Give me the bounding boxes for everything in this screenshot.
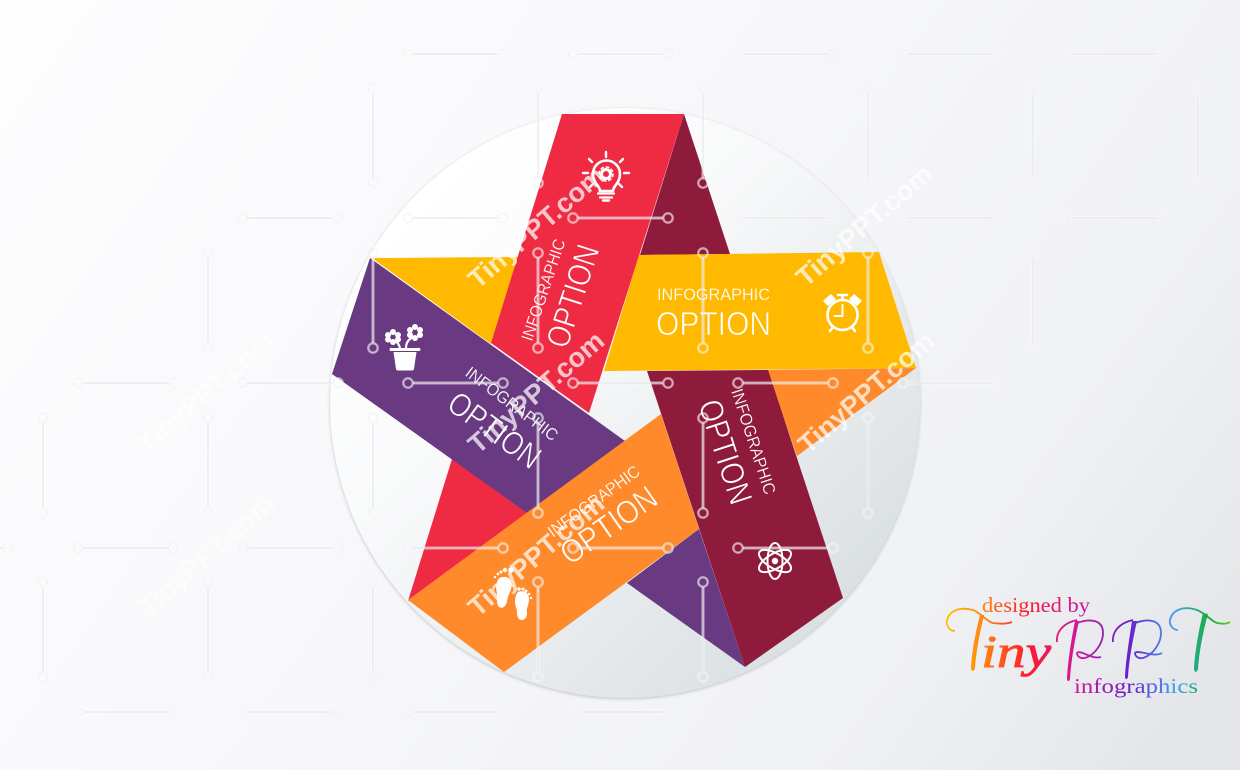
icon: flower pot: [385, 324, 423, 371]
icon: alarm clock: [824, 295, 861, 331]
text: red ribbon: [518, 237, 606, 352]
text: orange ribbon: INFOGRAPHIC: [544, 462, 644, 541]
text: yellow ribbon: OPTION: [656, 305, 771, 342]
text: yellow ribbon: INFOGRAPHIC: [657, 285, 770, 304]
ribbon: yellow main section: [604, 252, 916, 371]
ribbon: purple lower section: [627, 529, 745, 667]
text: maroon ribbon: INFOGRAPHIC: [727, 386, 779, 497]
watermark: TinyPPT.com: [132, 158, 940, 623]
ribbon: orange back section: [767, 368, 916, 456]
ribbon: maroon main section: [647, 370, 843, 667]
ribbon: maroon upper section: [640, 114, 730, 255]
watermark: TinyPPT.com: TinyPPT.com: [132, 325, 280, 460]
logo: designed by TinyPPT infographics: [947, 593, 1230, 698]
text: purple ribbon: OPTION: [441, 384, 548, 476]
icon: atom: [756, 543, 794, 579]
text: yellow ribbon: [656, 285, 771, 342]
icon: light bulb with gear: [583, 152, 629, 200]
logo: designed by TinyPPT infographics: designed by: [982, 593, 1091, 617]
circular backdrop: [330, 108, 920, 699]
text: maroon ribbon: OPTION: [691, 395, 760, 509]
ribbon: red upper section: [491, 114, 684, 413]
icon: footprints: [494, 567, 532, 620]
text: red ribbon: OPTION: [538, 240, 606, 352]
watermark: TinyPPT.com: TinyPPT.com: [790, 158, 938, 293]
watermark: TinyPPT.com: TinyPPT.com: [462, 160, 610, 295]
logo: designed by TinyPPT infographics: infographics: [1074, 674, 1198, 698]
ribbon: red lower section: [408, 459, 530, 601]
text: orange ribbon: OPTION: [553, 478, 664, 572]
ribbon: orange main section: [408, 414, 699, 672]
watermark: TinyPPT.com: TinyPPT.com: [792, 325, 940, 460]
ribbon: yellow back section: [372, 257, 518, 344]
ribbon: purple main section: [332, 258, 625, 513]
text: red ribbon: INFOGRAPHIC: [518, 237, 569, 343]
watermark: TinyPPT.com: TinyPPT.com: [132, 488, 280, 623]
text: purple ribbon: INFOGRAPHIC: [462, 363, 562, 445]
star: five folded ribbons: [332, 114, 916, 672]
watermark: TinyPPT.com: TinyPPT.com: [462, 325, 610, 460]
watermark: TinyPPT.com: TinyPPT.com: [462, 488, 610, 623]
logo: designed by TinyPPT infographics: iny: [981, 626, 1052, 677]
